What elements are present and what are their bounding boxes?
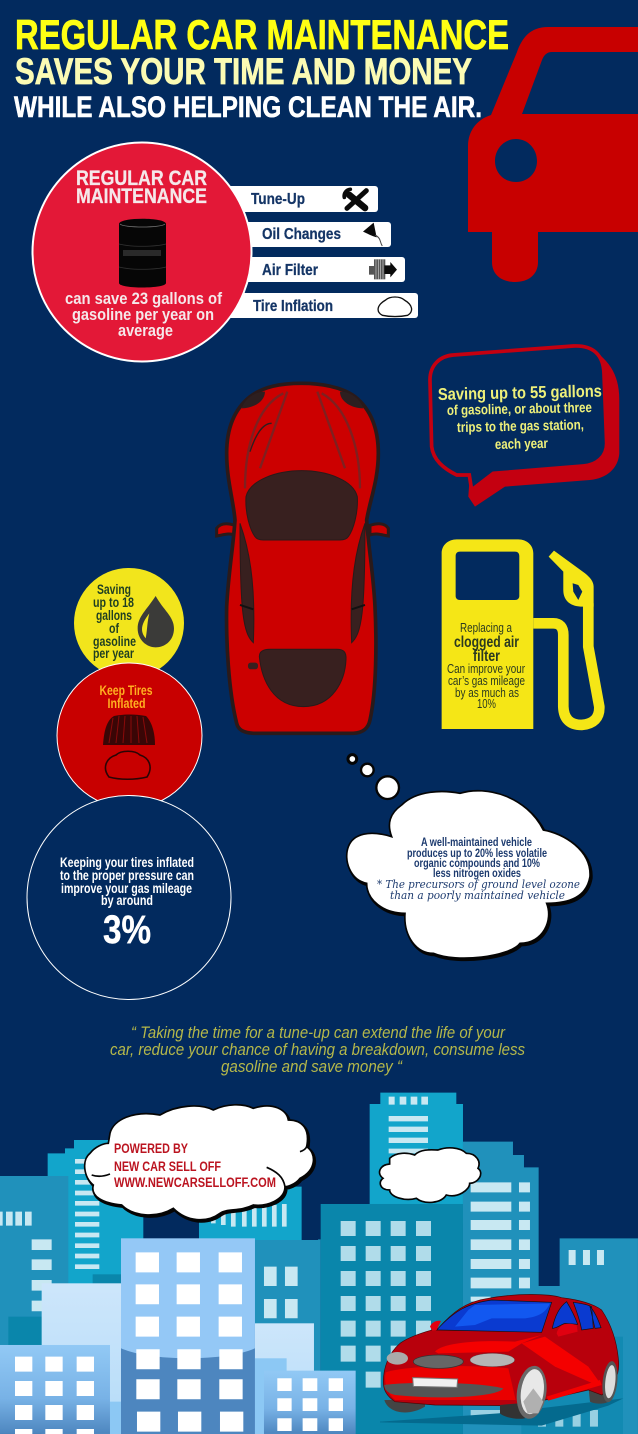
- icon: small cloud: [380, 1148, 481, 1202]
- icon: fuel pump with air filter text: Replacing a: [460, 620, 513, 635]
- quote: “ Taking the time for a tune-up can extend the life of your: [131, 1023, 506, 1042]
- panel: keep tires inflated: Keep Tires: [100, 682, 153, 698]
- panel: regular maintenance circle: gasoline per year on: [72, 306, 214, 324]
- panel: regular maintenance circle: can save 23 gallons of: [65, 290, 222, 308]
- callout: thought cloud: less nitrogen oxides: [433, 868, 521, 880]
- callout: thought cloud: A well-maintained vehicle: [421, 837, 532, 849]
- item: air filter: [215, 257, 405, 282]
- title: SAVES YOUR TIME AND MONEY: [15, 51, 472, 92]
- panel: 3 percent circle: to the proper pressure can: [60, 867, 194, 883]
- callout: thought cloud: produces up to 20% less volatile: [407, 848, 547, 860]
- panel: regular maintenance circle: MAINTENANCE: [76, 185, 207, 208]
- callout: thought cloud: organic compounds and 10%: [414, 858, 540, 870]
- item: tune-up: [215, 186, 378, 212]
- item: tune-up: Tune-Up: [251, 191, 305, 208]
- panel: saving up to 18 gallons: gasoline: [93, 633, 136, 649]
- item: oil changes: [215, 222, 391, 247]
- icon: fuel pump with air filter text: car’s gas mileage: [448, 673, 525, 688]
- panel: regular maintenance circle: REGULAR CAR: [76, 167, 207, 190]
- panel: saving up to 18 gallons: of: [109, 620, 119, 636]
- panel: saving up to 18 gallons: up to 18: [93, 594, 134, 610]
- quote: gasoline and save money “: [221, 1057, 403, 1076]
- icon: fuel pump with air filter text: by as much as: [455, 685, 519, 700]
- illustration: red sports car top view: [217, 383, 388, 733]
- callout: saving up to 55 gallons: of gasoline, or about three: [447, 399, 592, 418]
- icon: tire pressure gauge: [105, 751, 150, 779]
- icon: fuel pump with air filter text: clogged air: [454, 634, 519, 651]
- panel: 3 percent circle: Keeping your tires inflated: [60, 854, 194, 870]
- title: REGULAR CAR MAINTENANCE: [15, 11, 509, 58]
- icon: red car silhouette: [468, 27, 638, 282]
- title: [14, 11, 509, 124]
- icon: oil drop: [138, 596, 174, 647]
- callout: powered by cloud: NEW CAR SELL OFF: [114, 1159, 221, 1174]
- panel: saving up to 18 gallons: [74, 568, 184, 678]
- panel: 3 percent circle: 3%: [103, 908, 151, 952]
- callout: powered by cloud: [85, 1105, 315, 1221]
- panel: 3 percent circle: [27, 796, 231, 1000]
- panel: maintenance list: [215, 186, 418, 318]
- illustration: city skyline: [0, 1093, 638, 1434]
- icon: fuel pump with air filter text: 10%: [477, 696, 496, 711]
- quote: car, reduce your chance of having a breakdown, consume less: [110, 1040, 525, 1059]
- icon: fuel pump with air filter text: filter: [473, 648, 500, 665]
- callout: saving up to 55 gallons: trips to the gas station,: [457, 416, 584, 435]
- callout: saving up to 55 gallons: each year: [495, 435, 549, 452]
- icon: fuel pump with air filter text: [442, 539, 599, 729]
- panel: keep tires inflated: Inflated: [108, 695, 146, 711]
- panel: saving up to 18 gallons: per year: [93, 645, 134, 661]
- callout: thought cloud: [347, 755, 591, 960]
- panel: regular maintenance circle: [32, 142, 252, 362]
- illustration: red hatchback car: [380, 1294, 623, 1426]
- icon: fuel pump with air filter text: Can improve your: [447, 661, 526, 676]
- right half buildings: [318, 1093, 638, 1434]
- icon: tire tread: [103, 714, 155, 745]
- callout: saving up to 55 gallons: Saving up to 55 gallons: [438, 382, 602, 404]
- item: tire inflation: [215, 293, 418, 318]
- item: oil changes: Oil Changes: [262, 226, 341, 243]
- callout: saving up to 55 gallons: [430, 346, 619, 507]
- panel: regular maintenance circle: average: [118, 322, 173, 340]
- callout: thought cloud: than a poorly maintained vehicle: [390, 888, 565, 902]
- callout: thought cloud: * The precursors of ground level ozone: [377, 877, 580, 891]
- panel: 3 percent circle: by around: [101, 892, 153, 908]
- panel: keep tires inflated: [57, 663, 202, 808]
- callout: powered by cloud: POWERED BY: [114, 1141, 188, 1156]
- panel: saving up to 18 gallons: Saving: [97, 581, 131, 597]
- left half buildings: [0, 1140, 320, 1434]
- callout: powered by cloud: WWW.NEWCARSELLOFF.COM: [114, 1175, 276, 1190]
- quote: [110, 1023, 525, 1076]
- item: tire inflation: Tire Inflation: [253, 298, 333, 315]
- icon: oil barrel: [119, 219, 166, 288]
- panel: saving up to 18 gallons: gallons: [96, 607, 132, 623]
- item: air filter: Air Filter: [262, 262, 318, 279]
- panel: 3 percent circle: improve your gas mileage: [61, 880, 192, 896]
- title: WHILE ALSO HELPING CLEAN THE AIR.: [14, 91, 482, 124]
